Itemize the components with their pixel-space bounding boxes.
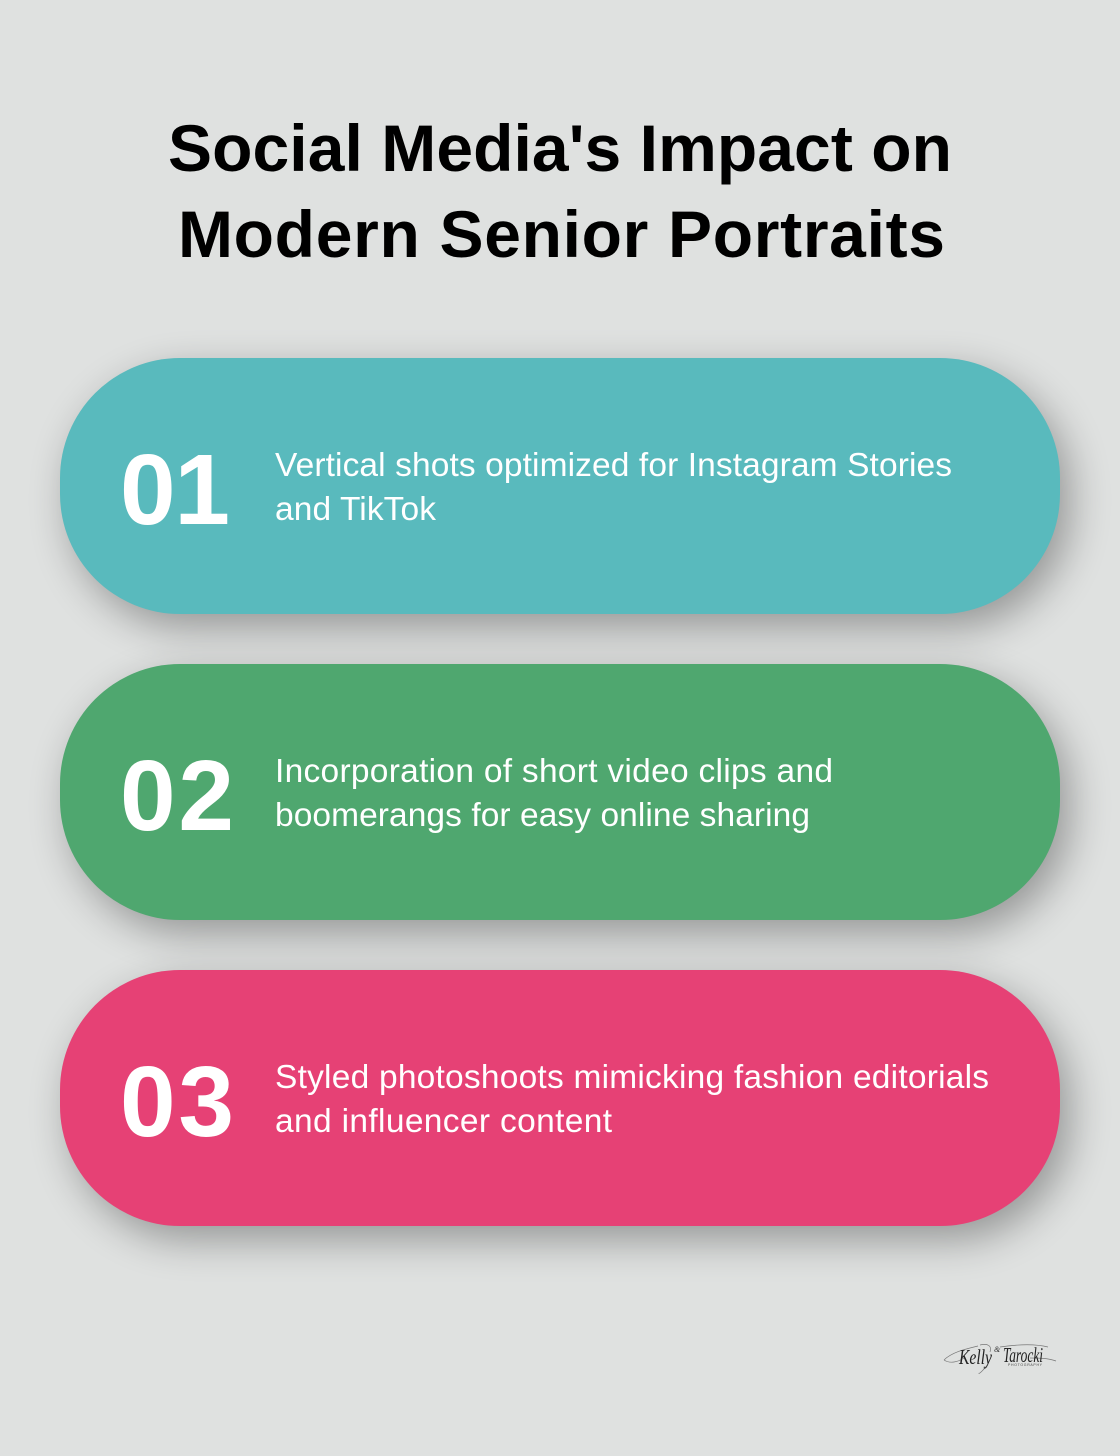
item 1 text: Vertical shots optimized for Instagram Stories xyxy=(275,447,952,484)
item 2 text: Incorporation of short video clips and xyxy=(275,753,833,790)
title xyxy=(168,111,952,271)
logo: photographer signature: & xyxy=(994,1345,1001,1354)
logo: photographer signature xyxy=(944,1343,1056,1373)
title: Social Media's Impact on xyxy=(168,111,952,185)
item 3 text: and influencer content xyxy=(275,1103,613,1140)
panel: pink card background xyxy=(60,970,1060,1226)
item 1 text xyxy=(275,447,952,528)
panel: teal card background xyxy=(60,358,1060,614)
item 3 text: Styled photoshoots mimicking fashion editorials xyxy=(275,1059,989,1096)
logo: photographer signature: Tarocki xyxy=(1003,1343,1043,1367)
item 1 number: 01 xyxy=(120,434,230,546)
item 2 text: boomerangs for easy online sharing xyxy=(275,797,810,834)
item 2 number: 02 xyxy=(120,740,234,852)
item 3 number: 03 xyxy=(120,1046,234,1158)
logo: photographer signature: PHOTOGRAPHY xyxy=(1008,1363,1043,1367)
title: Modern Senior Portraits xyxy=(178,197,945,271)
panel: green card background xyxy=(60,664,1060,920)
item 2 text xyxy=(275,753,833,834)
item 1 text: and TikTok xyxy=(275,491,436,528)
logo: photographer signature: Kelly xyxy=(958,1345,992,1369)
item 3 text xyxy=(275,1059,989,1140)
